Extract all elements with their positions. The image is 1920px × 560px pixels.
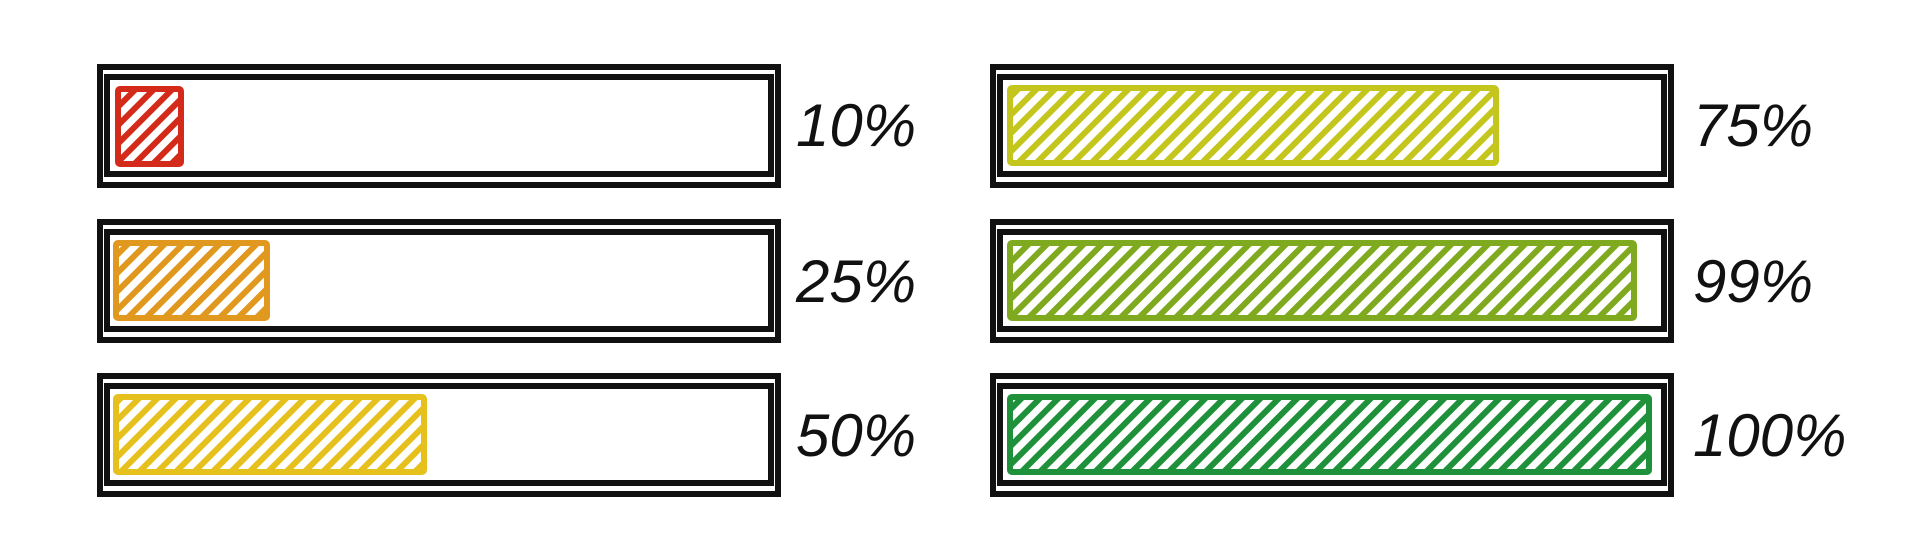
bar: 75% bbox=[993, 67, 1813, 185]
bar: 50% bbox=[100, 376, 916, 494]
fill: lime 75% bbox=[1010, 88, 1496, 163]
label: 75%: 75% bbox=[1693, 92, 1813, 159]
fill: orange 25% bbox=[116, 243, 267, 318]
label: 25%: 25% bbox=[795, 248, 916, 315]
label: 10%: 10% bbox=[796, 92, 916, 159]
bar: 100% bbox=[993, 376, 1846, 494]
fill: red 10% bbox=[118, 89, 181, 164]
bar: 99% bbox=[993, 222, 1813, 340]
fill: olive green 99% bbox=[1010, 243, 1634, 318]
fill: green 100% bbox=[1010, 397, 1649, 472]
label: 50%: 50% bbox=[796, 402, 916, 469]
label: 100%: 100% bbox=[1693, 402, 1846, 469]
bar: 25% bbox=[100, 222, 916, 340]
label: 99%: 99% bbox=[1693, 248, 1813, 315]
bar: 10% bbox=[100, 67, 916, 185]
fill: yellow 50% bbox=[116, 397, 424, 472]
